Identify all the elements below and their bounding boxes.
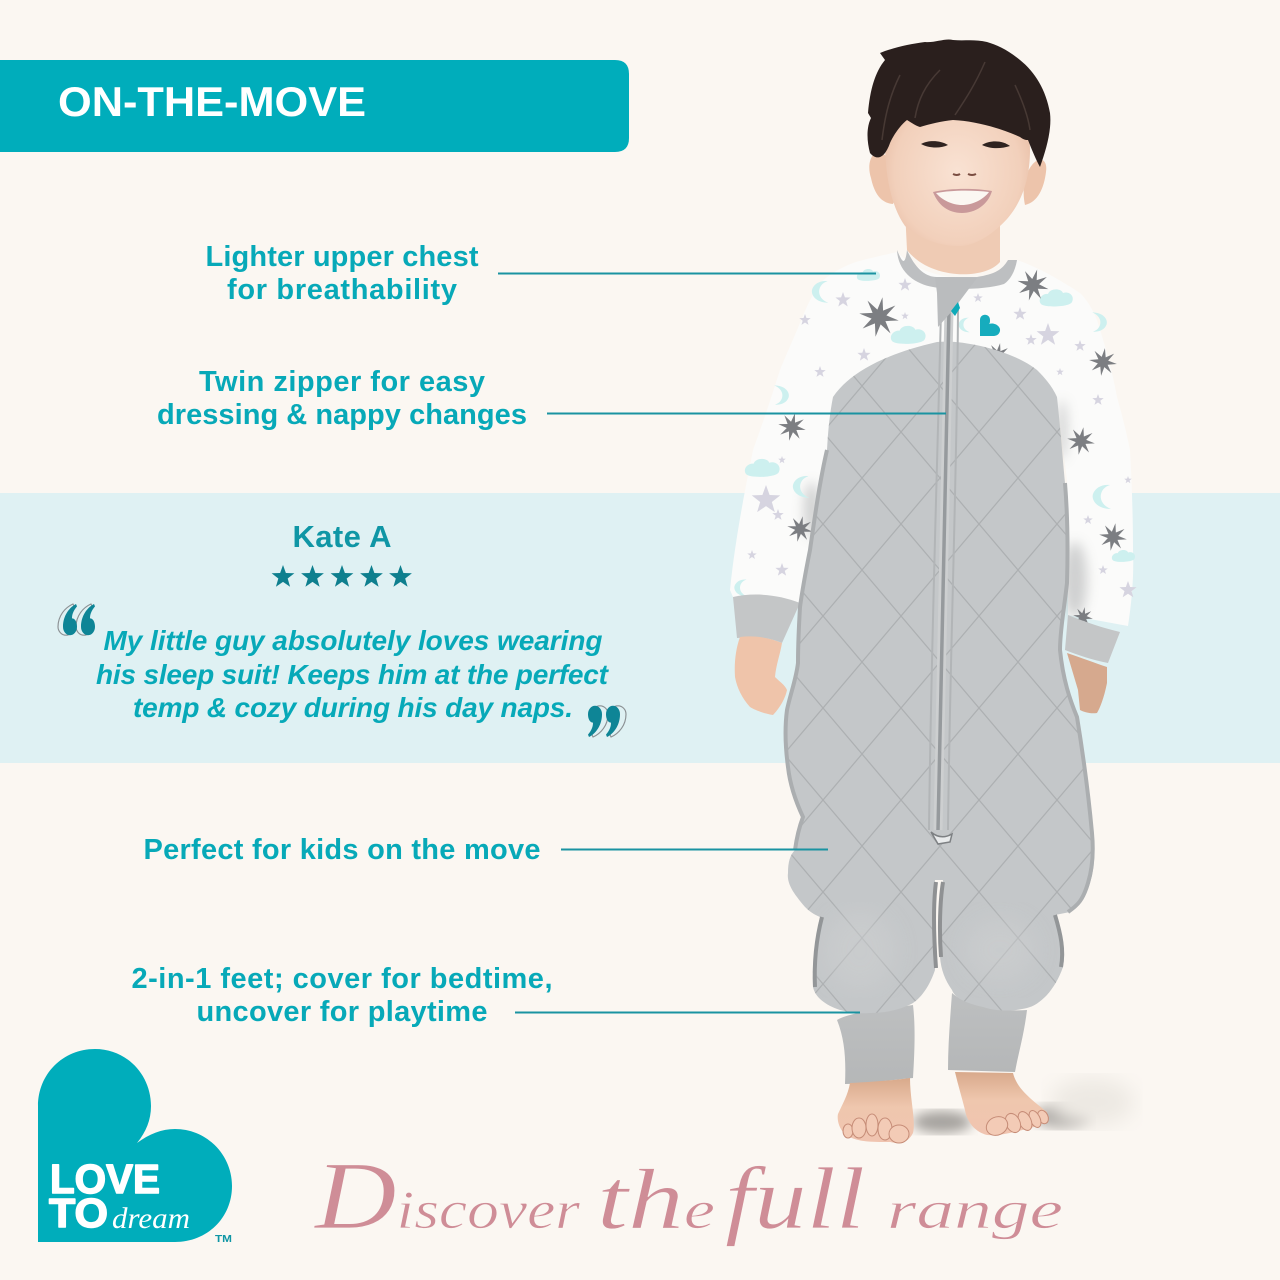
- callout: kids on the move: Perfect for kids on the move: [144, 834, 540, 866]
- underarm shading: [804, 400, 1087, 618]
- sack edge seams: [786, 450, 1093, 987]
- hair: [868, 40, 1050, 167]
- face: [885, 82, 1030, 246]
- review text: temp & cozy during his day naps.: [133, 692, 573, 723]
- legs and leg cuffs: [837, 993, 1027, 1084]
- twin zipper: [929, 310, 958, 830]
- script tagline: th e: [597, 1151, 715, 1247]
- title banner: [0, 60, 629, 152]
- sleeve print: clouds and moons: [734, 269, 1135, 596]
- logo: Love To Dream heart: LOVE: [50, 1156, 160, 1202]
- logo: Love To Dream heart: dream: [112, 1202, 190, 1235]
- floor shadow: [912, 1078, 1134, 1133]
- brand tag on chest: [980, 315, 1000, 336]
- hands: [735, 636, 1107, 715]
- collar: [897, 250, 1017, 289]
- eyes: [921, 141, 948, 148]
- logo: Love To Dream heart: [38, 1049, 232, 1245]
- five star rating: [272, 565, 412, 587]
- toes: [843, 1109, 1050, 1143]
- testimonial: [58, 519, 626, 737]
- script tagline: Discover: [313, 1142, 581, 1249]
- head: [868, 40, 1050, 246]
- callout: lighter upper chest: for breathability: [227, 274, 457, 306]
- bare feet: [838, 1072, 1050, 1143]
- callout: lighter upper chest: [206, 241, 876, 306]
- callout: 2-in-1 feet: uncover for playtime: [196, 996, 488, 1028]
- lighter fabric patches: [834, 918, 1032, 976]
- callout: twin zipper: dressing & nappy changes: [157, 399, 527, 431]
- opening quote mark: [58, 604, 95, 635]
- testimonial band: [0, 493, 1280, 763]
- neck: [905, 210, 1000, 274]
- script tagline: range: [887, 1180, 1063, 1240]
- sleeve print: dark stars: [775, 265, 1129, 629]
- callout: twin zipper: [157, 366, 946, 431]
- review text: [96, 625, 610, 723]
- sleeves and chest yoke: [730, 252, 1137, 629]
- title banner: ON-THE-MOVE: [58, 78, 366, 125]
- review text: his sleep suit! Keeps him at the perfect: [96, 659, 610, 690]
- child figure wearing sleep suit: [730, 40, 1137, 1143]
- script tagline: [313, 1142, 1063, 1249]
- quilted sack body: [784, 342, 1095, 1013]
- cuffs: [733, 595, 1120, 663]
- logo: Love To Dream heart: TO: [49, 1190, 108, 1236]
- callout: 2-in-1 feet: [132, 963, 860, 1028]
- sleeve print: pale stars: [747, 278, 1137, 597]
- callout: lighter upper chest: Lighter upper chest: [206, 241, 479, 273]
- review text: My little guy absolutely loves wearing: [104, 625, 602, 656]
- closing quote mark: [588, 706, 626, 737]
- zipper placket flap: [935, 277, 977, 327]
- logo: Love To Dream heart: TM: [215, 1234, 232, 1245]
- nose: [953, 174, 976, 175]
- crotch drawstring: [931, 832, 952, 844]
- callout: 2-in-1 feet: 2-in-1 feet; cover for bedtime,: [132, 963, 552, 995]
- mouth: [933, 189, 992, 213]
- reviewer name: Kate A: [292, 519, 392, 554]
- script tagline: full: [725, 1151, 865, 1248]
- ears: [869, 152, 896, 204]
- callout: twin zipper: Twin zipper for easy: [199, 366, 485, 398]
